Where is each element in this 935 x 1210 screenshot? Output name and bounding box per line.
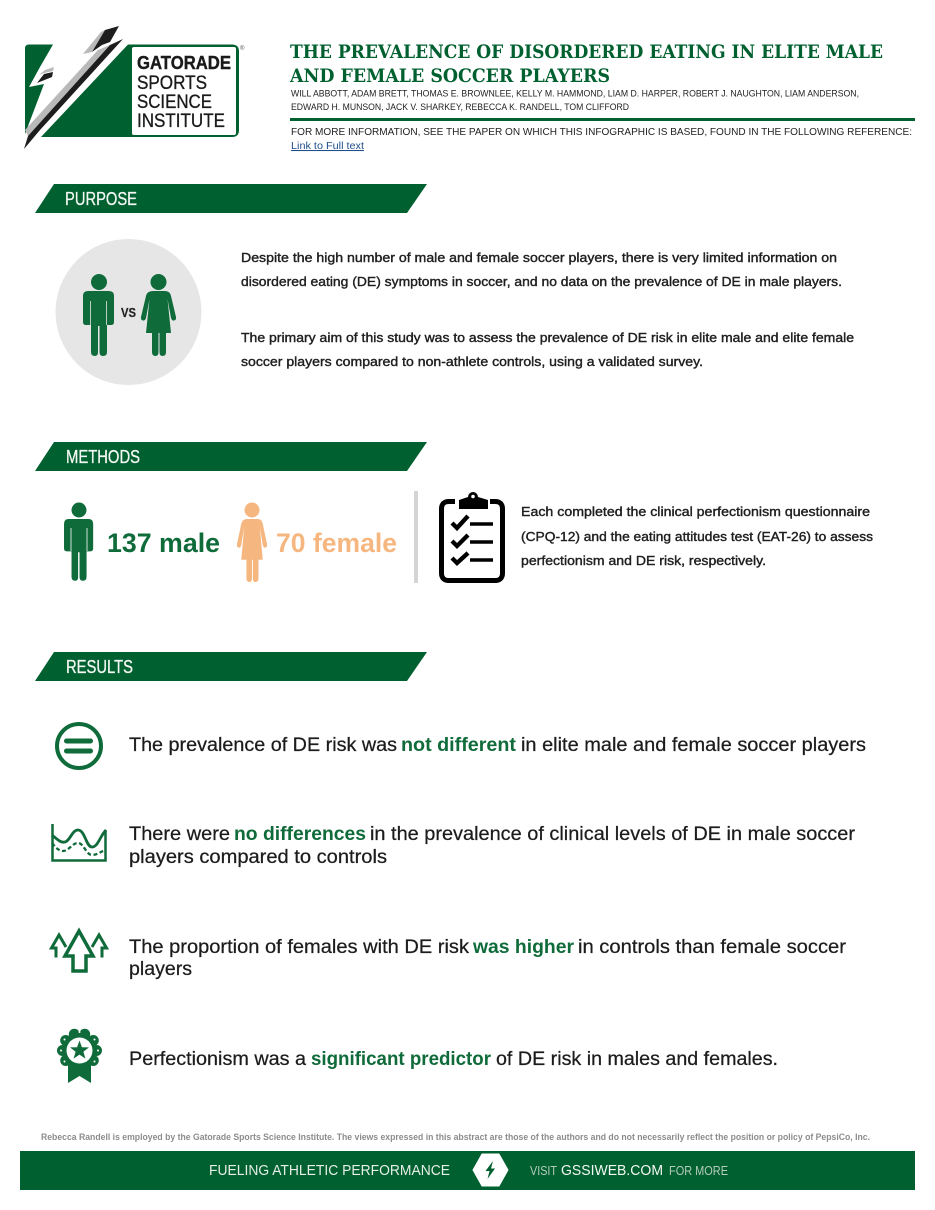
result 2: players compared to controls [129, 847, 387, 868]
icon: hexagon bolt [473, 1154, 508, 1186]
result 1: The prevalence of DE risk was [129, 735, 397, 756]
result 3 [129, 937, 847, 980]
result 2: in the prevalence of clinical levels of DE in male soccer [370, 824, 856, 845]
section header: results [35, 652, 427, 681]
reference note and link: Link to Full text [291, 140, 364, 152]
footer band: FOR MORE [669, 1164, 728, 1178]
logo: Gatorade Sports Science Institute [24, 26, 245, 149]
section header: methods: METHODS [66, 447, 140, 467]
section header: purpose [35, 184, 427, 213]
logo: Gatorade Sports Science Institute: SCIENCE [137, 92, 212, 113]
methods text: Each completed the clinical perfectionism questionnaire [521, 504, 870, 519]
icon: overlapping line chart [52, 824, 106, 860]
footer band: VISIT [530, 1164, 557, 1178]
purpose text: Despite the high number of male and female soccer players, there is very limited information on [241, 250, 837, 265]
stat: 137 male: 137 male [107, 528, 220, 558]
stat: 70 female: 70 female [276, 528, 397, 558]
footer band [20, 1151, 915, 1190]
authors: EDWARD H. MUNSON, JACK V. SHARKEY, REBECCA K. RANDELL, TOM CLIFFORD [291, 102, 629, 113]
result 2: There were [129, 824, 230, 845]
result 4: significant predictor [311, 1049, 492, 1070]
section header: purpose: PURPOSE [65, 189, 137, 209]
icon: male vs female: VS [121, 306, 136, 320]
icon: male participant [64, 502, 93, 581]
result 4 [129, 1049, 778, 1070]
authors [291, 88, 859, 113]
result 4: of DE risk in males and females. [496, 1049, 778, 1070]
logo: Gatorade Sports Science Institute: SPORTS [137, 73, 207, 94]
icon: award ribbon [57, 1029, 102, 1083]
icon: clipboard checklist [442, 492, 502, 580]
methods text [521, 504, 874, 568]
title: AND FEMALE SOCCER PLAYERS [289, 65, 610, 87]
result 3: players [129, 959, 192, 980]
reference note and link: FOR MORE INFORMATION, SEE THE PAPER ON WHICH THIS INFOGRAPHIC IS BASED, FOUND IN THE FOLLOWING REFERENCE: [291, 127, 912, 138]
result 3: The proportion of females with DE risk [129, 937, 470, 958]
result 1 [129, 735, 866, 756]
logo: Gatorade Sports Science Institute: GATORADE [137, 53, 231, 73]
methods text: perfectionism and DE risk, respectively. [521, 553, 766, 568]
reference note and link [291, 127, 912, 152]
section header: results: RESULTS [66, 657, 133, 677]
purpose text [241, 250, 854, 369]
result 3: was higher [472, 937, 575, 958]
purpose text: disordered eating (DE) symptoms in soccer, and no data on the prevalence of DE in male players. [241, 274, 842, 289]
logo: Gatorade Sports Science Institute: ® [240, 45, 245, 52]
result 4: Perfectionism was a [129, 1049, 306, 1070]
title: THE PREVALENCE OF DISORDERED EATING IN ELITE MALE [290, 41, 883, 63]
result 1: not different [401, 735, 517, 756]
result 2: no differences [234, 824, 366, 845]
icon: equal sign [57, 724, 101, 768]
title [289, 41, 883, 87]
section header: methods [35, 442, 427, 471]
purpose text: soccer players compared to non-athlete controls, using a validated survey. [241, 354, 703, 369]
disclaimer: Rebecca Randell is employed by the Gatorade Sports Science Institute. The views expressed in this abstract are those of the authors and do not necessarily reflect the position or policy of PepsiCo, Inc. [41, 1132, 870, 1142]
result 3: in controls than female soccer [578, 937, 847, 958]
result 2 [129, 824, 856, 868]
methods text: (CPQ-12) and the eating attitudes test (EAT-26) to assess [521, 529, 874, 544]
footer band: GSSIWEB.COM [561, 1162, 663, 1179]
authors: WILL ABBOTT, ADAM BRETT, THOMAS E. BROWNLEE, KELLY M. HAMMOND, LIAM D. HARPER, ROBERT J. NAUGHTON, LIAM ANDERSON, [291, 88, 859, 100]
purpose text: The primary aim of this study was to assess the prevalence of DE risk in elite male and elite female [241, 330, 854, 345]
result 1: in elite male and female soccer players [521, 735, 866, 756]
logo: Gatorade Sports Science Institute: INSTITUTE [137, 111, 225, 132]
footer band: FUELING ATHLETIC PERFORMANCE [209, 1162, 450, 1179]
icon: male vs female [56, 239, 202, 385]
icon: female participant [237, 502, 267, 582]
icon: upward arrows [52, 931, 106, 971]
